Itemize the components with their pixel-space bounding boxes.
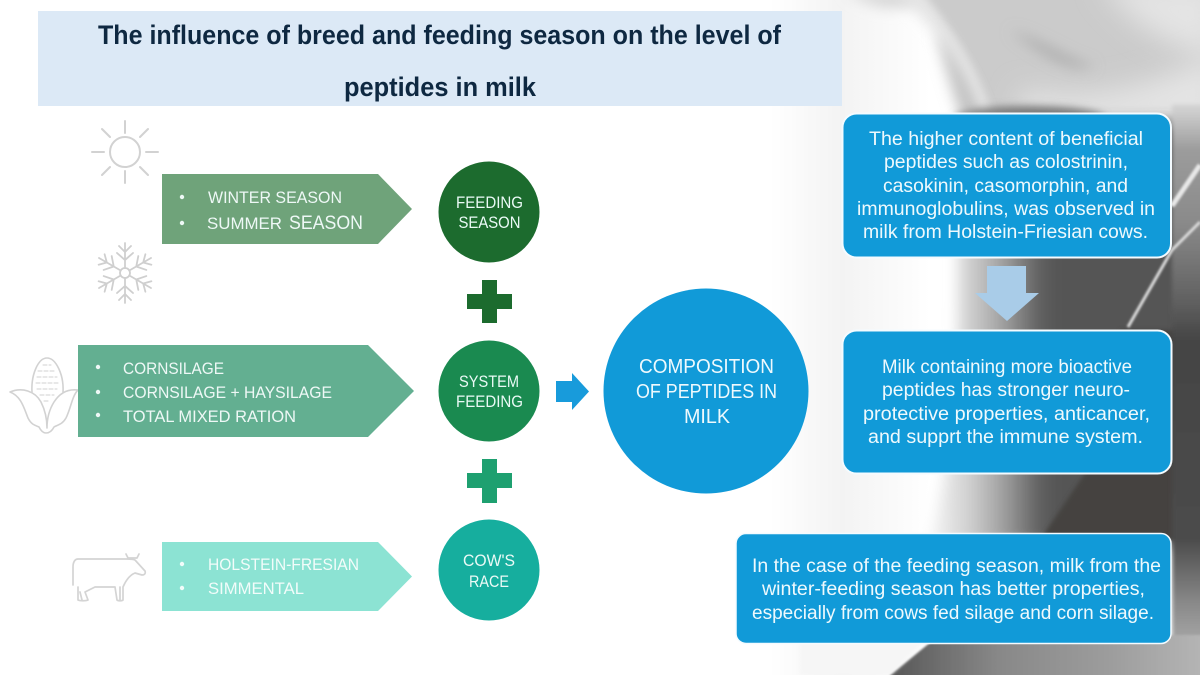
arrow: down between callouts <box>975 266 1039 321</box>
circle: cow's race: RACE <box>469 572 509 591</box>
circle: feeding season <box>438 162 540 262</box>
arrow: feeding season options: WINTER SEASON <box>208 188 342 207</box>
arrow: cow race options <box>162 542 412 611</box>
circle: composition of peptides in milk <box>604 288 808 494</box>
circle: composition of peptides in milk: OF PEPTIDES IN <box>636 381 777 403</box>
arrow: system feeding options <box>78 345 414 437</box>
circle: feeding season: SEASON <box>458 213 520 232</box>
arrow: system feeding options: TOTAL MIXED RATION <box>123 407 296 426</box>
icon: snowflake <box>95 243 155 303</box>
icon: cow <box>73 554 145 601</box>
arrow: feeding season options: SUMMER <box>207 214 282 233</box>
callout: beneficial peptides: The higher content of beneficial <box>869 129 1143 150</box>
arrow: system feeding options: CORNSILAGE <box>123 359 224 378</box>
callout: beneficial peptides: casokinin, casomorphin, and <box>883 176 1128 197</box>
title banner <box>38 11 842 106</box>
icon: corn <box>10 358 78 433</box>
icon: plus teal green <box>467 459 512 503</box>
circle: cow's race <box>438 520 540 620</box>
callout: feeding season conclusion: winter-feeding season has better properties, <box>761 579 1145 600</box>
arrow: feeding season options <box>162 174 412 244</box>
callout: bioactive peptides properties: protective properties, anticancer, <box>863 404 1150 425</box>
callout: feeding season conclusion <box>736 534 1171 644</box>
circle: system feeding <box>438 340 540 442</box>
arrow: cow race options: SIMMENTAL <box>208 579 304 598</box>
circle: cow's race: COW'S <box>463 551 515 570</box>
callout: bioactive peptides properties <box>842 330 1172 474</box>
arrow: to composition <box>556 373 589 410</box>
circle: composition of peptides in milk: MILK <box>684 406 731 428</box>
circle: system feeding: FEEDING <box>456 392 523 411</box>
circle: composition of peptides in milk: COMPOSITION <box>639 356 774 378</box>
arrow: feeding season options: SEASON <box>289 212 363 234</box>
title banner: The influence of breed and feeding season on the level of <box>98 20 781 50</box>
icon: plus dark green <box>467 280 512 323</box>
arrow: system feeding options: CORNSILAGE + HAYSILAGE <box>123 383 332 402</box>
title banner: peptides in milk <box>344 72 536 102</box>
callout: beneficial peptides <box>842 114 1171 258</box>
callout: beneficial peptides: peptides such as colostrinin, <box>884 152 1128 173</box>
callout: bioactive peptides properties: Milk containing more bioactive <box>882 357 1132 378</box>
circle: system feeding: SYSTEM <box>459 372 519 391</box>
callout: beneficial peptides: milk from Holstein-Friesian cows. <box>863 222 1148 243</box>
circle: feeding season: FEEDING <box>456 193 523 212</box>
callout: beneficial peptides: immunoglobulins, was observed in <box>857 199 1155 220</box>
callout: feeding season conclusion: In the case of the feeding season, milk from the <box>752 556 1161 577</box>
icon: sun <box>92 121 158 183</box>
callout: bioactive peptides properties: and supprt the immune system. <box>868 427 1143 448</box>
callout: bioactive peptides properties: peptides has stronger neuro- <box>882 380 1130 401</box>
background: milk swirl photo <box>802 0 1200 675</box>
callout: feeding season conclusion: especially from cows fed silage and corn silage. <box>752 603 1154 624</box>
arrow: cow race options: HOLSTEIN-FRESIAN <box>208 555 359 574</box>
